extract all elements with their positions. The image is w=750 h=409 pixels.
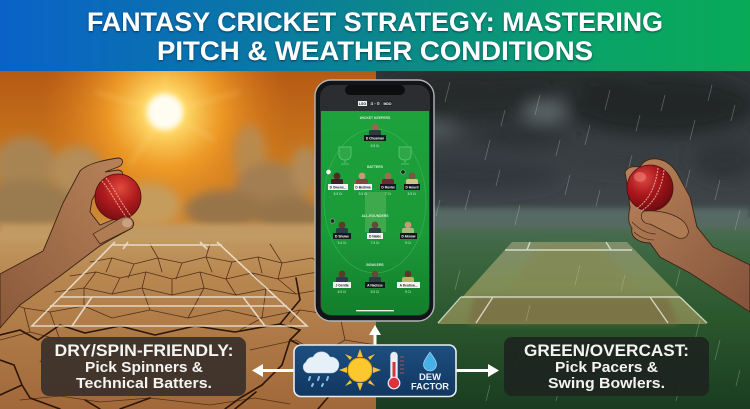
player name tags: A Deubsa... [400, 283, 417, 287]
player credits: 9 Cr [405, 290, 412, 294]
score bar: LSG [359, 102, 366, 106]
left scene: dry sunny pitch [0, 71, 376, 409]
sun rays [95, 71, 240, 165]
icon: sun [147, 94, 183, 130]
title: FANTASY CRICKET STRATEGY: MASTERING [87, 7, 663, 37]
arrow: up to phone [369, 325, 381, 346]
player name tags: D Rovlei [381, 185, 395, 189]
icon: thermometer [388, 352, 404, 389]
callout: dry spin-friendly: Pick Spinners & [85, 360, 204, 376]
player name tags: D Hourd [405, 185, 419, 189]
pitch crease lines, left [32, 242, 307, 326]
player name tags: J Gentia [335, 283, 349, 287]
icon: dew drop and label: FACTOR [411, 382, 450, 392]
header band [0, 0, 750, 71]
icon: sun [339, 349, 381, 391]
score bar: 4 - 0 [370, 101, 380, 106]
home indicator [356, 310, 394, 311]
role labels: BATTERS [367, 165, 384, 169]
player credits: 9.5 Cr [359, 192, 368, 196]
cricket ball, right [627, 165, 673, 211]
title [87, 7, 663, 66]
callout: dry spin-friendly: DRY/SPIN-FRIENDLY: [54, 341, 234, 360]
callout: green overcast [504, 337, 709, 396]
player name tags: D Aknow [402, 234, 416, 238]
callout: dry spin-friendly: Technical Batters. [76, 376, 212, 392]
icon: dew drop and label: DEW [419, 372, 442, 382]
right hand holding ball [625, 159, 750, 312]
heavy earth cracks [0, 278, 330, 409]
player credits: 5.5 Cr [408, 192, 417, 196]
icon: rain cloud [303, 352, 339, 386]
role labels: WICKET KEEPERS [360, 116, 391, 120]
green pitch strip [438, 242, 707, 324]
left hand holding ball [0, 158, 141, 328]
arrow: right to green callout [456, 364, 499, 377]
player credits: 7.5 Cr [371, 241, 380, 245]
dust clouds [0, 125, 325, 233]
storm clouds [380, 68, 750, 191]
score bar: MDD [384, 102, 392, 106]
player credits: 9.5 Cr [371, 144, 380, 148]
cracked earth ground [0, 232, 376, 409]
player name tags: D Shuwe [335, 234, 349, 238]
arrow: left to dry callout [252, 364, 294, 377]
callout: green overcast: Pick Pacers & [555, 360, 659, 376]
callout: dry spin-friendly [41, 337, 246, 396]
role labels: BOWLERS [366, 263, 384, 267]
player name tags [328, 135, 420, 288]
phone mockup [315, 80, 434, 321]
player credits: 6.5 Cr [338, 290, 347, 294]
callout: green overcast: GREEN/OVERCAST: [524, 341, 689, 360]
role labels [360, 116, 391, 267]
callout: green overcast: Swing Bowlers. [548, 376, 665, 392]
player name tags: D Bedrwa [355, 185, 371, 189]
title: PITCH & WEATHER CONDITIONS [157, 36, 593, 66]
player name tags: A Nacisse [367, 283, 383, 287]
cricket field [321, 111, 429, 315]
pitch crease lines, right [438, 242, 707, 323]
score bar [358, 101, 392, 106]
fine earth cracks [0, 244, 376, 405]
player avatars [331, 124, 418, 283]
player credits: 9 Cr [405, 241, 412, 245]
player credits [334, 144, 417, 294]
player name tags: D Owens... [330, 185, 347, 189]
player credits: 5.5 Cr [371, 290, 380, 294]
player credits: 7 Cr [385, 192, 392, 196]
player name tags: D Nakle [369, 234, 381, 238]
player credits: 9.4 Cr [338, 241, 347, 245]
role labels: ALL-ROUNDERS [361, 214, 389, 218]
cricket ball, left [95, 174, 141, 220]
weather conditions panel [294, 345, 456, 396]
green outfield [376, 218, 750, 409]
icon: dew drop and label [411, 352, 450, 392]
phone notch [345, 85, 405, 95]
right scene: green overcast pitch [376, 68, 750, 409]
player name tags: D Chusman [366, 136, 384, 140]
trophy watermarks [339, 147, 411, 164]
player credits: 5.5 Cr [334, 192, 343, 196]
player status badges [326, 170, 405, 223]
rain streaks [396, 82, 740, 401]
